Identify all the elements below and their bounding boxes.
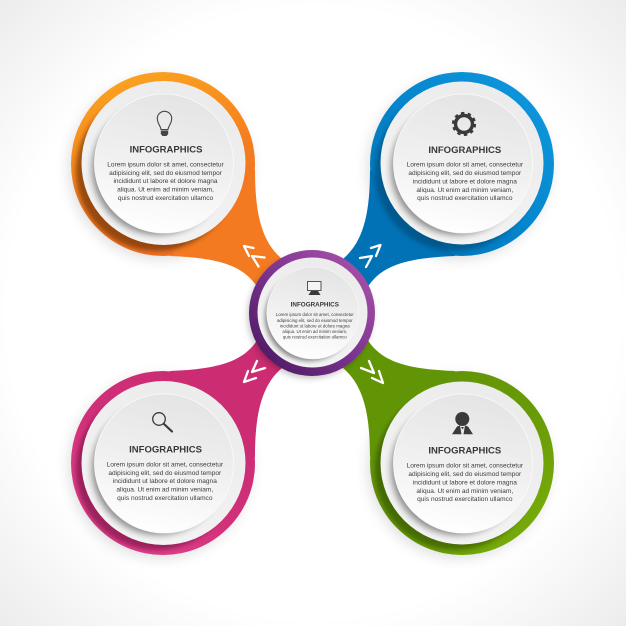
arrows: pink [244,361,265,382]
heading: INFOGRAPHICS [130,144,202,155]
ground shadow [69,376,251,558]
text block: incididunt ut labore et dolore magna [413,479,517,486]
text block: quis nostrud exercitation ullamco [283,335,347,340]
text block: adipisicing elit, sed do eiusmod tempor [277,318,353,323]
text block: aliqua. Ut enim ad minim veniam, [116,487,213,494]
text block: incididunt ut labore et dolore magna [280,323,350,328]
text block [276,312,354,340]
panel: orange item [69,72,286,288]
text block [107,461,224,502]
heading: INFOGRAPHICS [428,446,501,457]
orange teardrop shape [71,72,286,288]
inner disc [394,394,532,533]
text block: quis nostrud exercitation ullamco [117,495,213,502]
ground shadow [368,376,550,558]
green teardrop shape [339,339,554,555]
text block: adipisicing elit, sed do eiusmod tempor [108,470,222,477]
text block: adipisicing elit, sed do eiusmod tempor [408,170,522,177]
text block: quis nostrud exercitation ullamco [417,195,513,202]
outer white disc [82,81,246,245]
outer white disc [380,82,544,244]
heading: INFOGRAPHICS [291,302,339,309]
text block [107,161,225,202]
inner disc [267,267,359,359]
text block: quis nostrud exercitation ullamco [118,195,214,202]
arrows: blue [360,245,380,267]
text block: incididunt ut labore et dolore magna [113,178,218,185]
text block: adipisicing elit, sed do eiusmod tempor [109,170,223,177]
text block: incididunt ut labore et dolore magna [413,178,517,185]
ground shadow [69,77,251,259]
icon: magnifier [153,413,172,432]
text block: aliqua. Ut enim ad minim veniam, [416,488,513,495]
text block: Lorem ipsum dolor sit amet, consectetur [407,161,524,168]
pink teardrop shape [71,339,286,555]
text block: Lorem ipsum dolor sit amet, consectetur [407,463,524,470]
text block: incididunt ut labore et dolore magna [113,478,217,485]
text block [407,161,524,202]
icon: monitor [308,282,321,295]
icon: person [452,412,473,434]
panel: center item [248,250,375,378]
text block: aliqua. Ut enim ad minim veniam, [416,187,513,194]
inner disc [394,94,532,233]
arrows: orange [244,246,264,266]
heading: INFOGRAPHICS [129,444,202,455]
center shadow [248,254,372,378]
heading: INFOGRAPHICS [428,145,501,156]
icon: gear [453,113,475,135]
text block [407,463,524,503]
inner disc [94,94,234,233]
text block: adipisicing elit, sed do eiusmod tempor [408,471,522,478]
outer white disc [82,381,246,545]
panel: pink item [69,339,286,558]
inner disc [94,394,234,533]
arrows: green [361,361,383,383]
blue teardrop shape [339,72,554,288]
text block: quis nostrud exercitation ullamco [417,496,513,503]
text block: Lorem ipsum dolor sit amet, consectetur [276,312,354,317]
text block: Lorem ipsum dolor sit amet, consectetur [107,461,224,468]
panel: green item [339,339,554,558]
ground shadow [368,77,550,259]
outer white disc [380,382,544,544]
panel: blue item [339,72,554,288]
text block: Lorem ipsum dolor sit amet, consectetur [107,161,225,168]
text block: aliqua. Ut enim ad minim veniam, [117,187,214,194]
purple ring [249,250,375,376]
outer white disc [258,258,368,368]
text block: aliqua. Ut enim ad minim veniam, [282,329,347,334]
icon: light bulb [157,111,172,136]
